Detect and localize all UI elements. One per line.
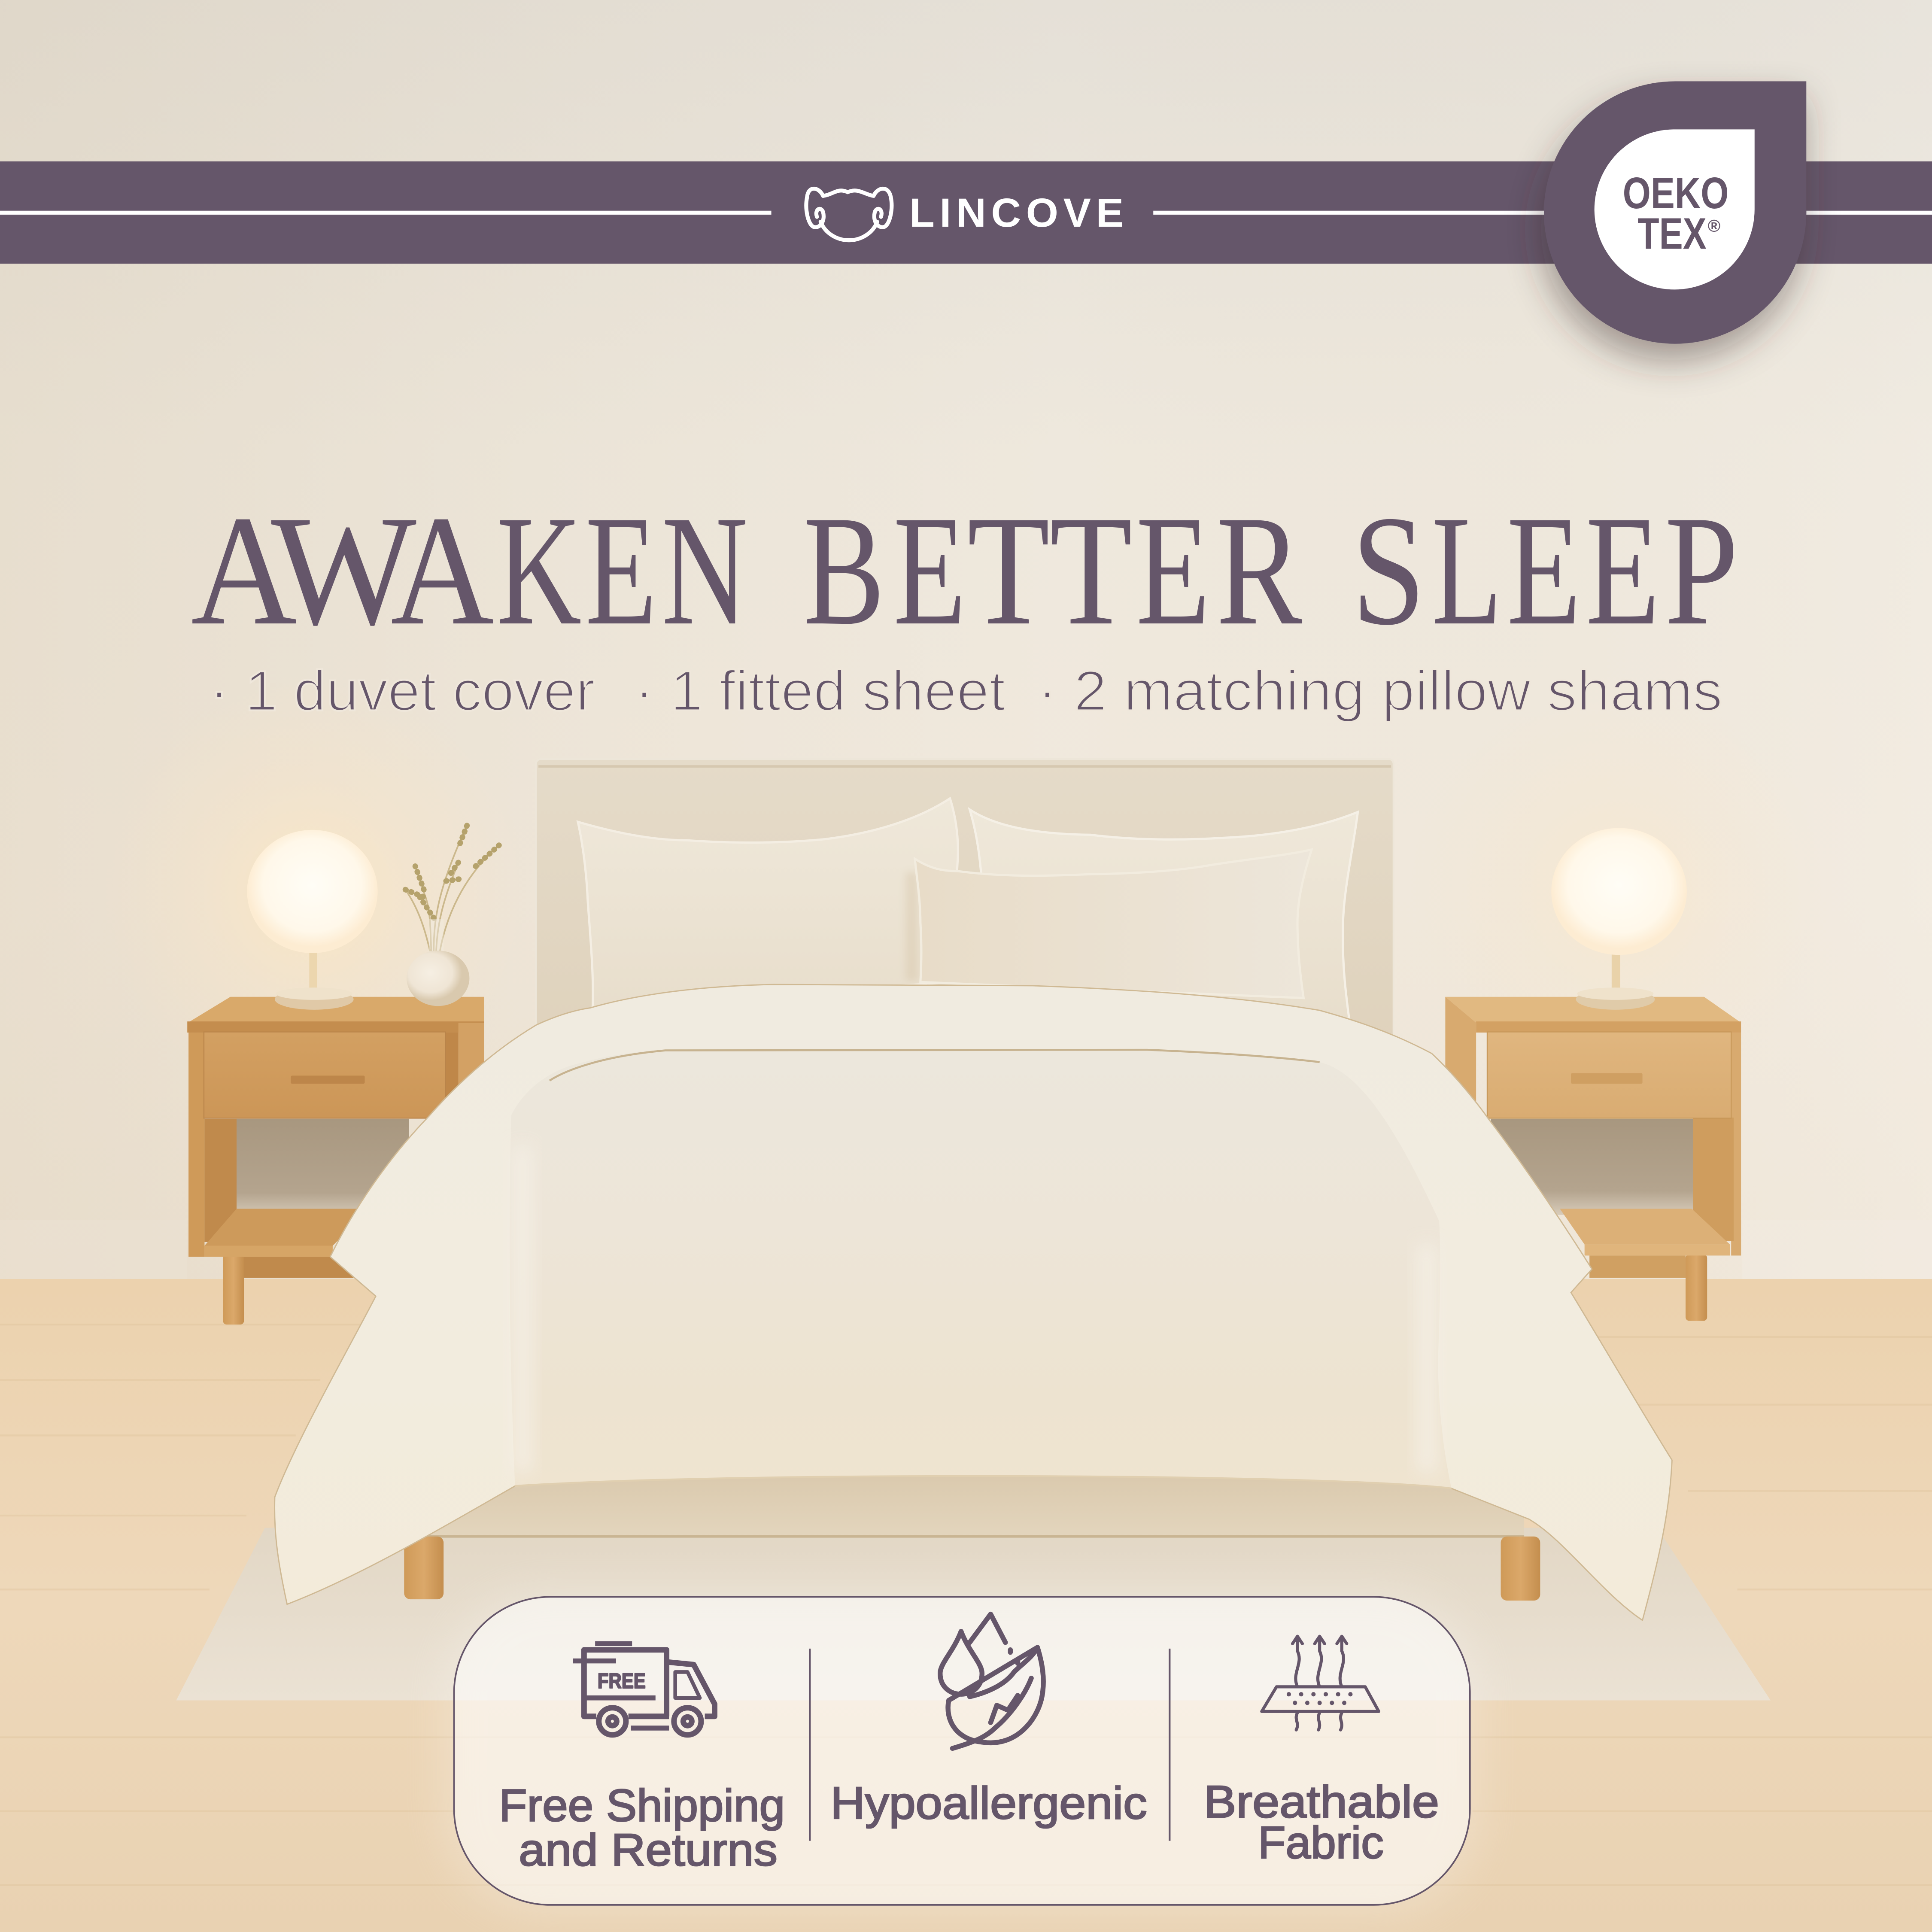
back right pillow: [970, 810, 1358, 1019]
left drawer handle: [291, 1075, 365, 1084]
back left pillow: [578, 799, 958, 1008]
logo: bear icon: [806, 188, 892, 240]
main title: E: [893, 483, 966, 658]
main title: A: [191, 483, 297, 658]
left lamp: [247, 830, 378, 1010]
feature labels: Hypoallergenic: [830, 1777, 1147, 1829]
divider two: [1169, 1649, 1170, 1841]
left bed leg: [404, 1537, 444, 1599]
left nightstand: [187, 997, 484, 1324]
main title: L: [1432, 483, 1502, 658]
subtitle list: · 2 matching pillow shams: [1037, 659, 1722, 722]
main title: T: [967, 483, 1050, 658]
lamp glow on wall: [96, 677, 1829, 1109]
main title: E: [585, 483, 657, 658]
duvet side highlight left: [513, 1146, 532, 1473]
subtitle list: · 1 duvet cover: [210, 659, 595, 722]
front pillow shadow: [905, 872, 918, 981]
feature labels: Breathable: [1204, 1776, 1439, 1827]
subtitle list: [210, 659, 1722, 722]
main title: R: [1216, 483, 1303, 658]
feature labels: [499, 1776, 1439, 1875]
vase with dried stems: [405, 826, 500, 1006]
OEKO-TEX badge: [1544, 81, 1806, 344]
right lamp: [1551, 828, 1687, 1010]
main title: T: [1050, 483, 1132, 658]
feature labels: Free Shipping: [499, 1780, 785, 1831]
panel glow: [441, 1587, 1482, 1917]
badge text: ®: [1708, 216, 1720, 236]
divider one: [809, 1649, 811, 1841]
icon: delivery truck: [573, 1643, 715, 1735]
bed base: [401, 1473, 1540, 1601]
left nightstand drawer: [204, 1032, 445, 1118]
wall background: [0, 0, 1932, 1282]
main title: N: [662, 483, 748, 658]
right bed leg: [1501, 1537, 1540, 1601]
icon: breathable fabric: [1262, 1636, 1379, 1730]
main title: E: [1507, 483, 1581, 658]
brand band: [0, 161, 1932, 264]
main title: E: [1136, 483, 1210, 658]
main title: W: [271, 483, 418, 658]
icon: water drop and feather: [940, 1614, 1043, 1748]
main title: P: [1665, 483, 1738, 658]
duvet fold crease: [550, 1050, 1320, 1081]
badge text: OEKO: [1623, 168, 1728, 218]
badge text: [1623, 168, 1728, 258]
area rug: [176, 1528, 1771, 1700]
main title: A: [391, 483, 494, 658]
pillows: [578, 799, 1358, 1019]
icon: delivery truck: FREE: [598, 1670, 646, 1693]
logo: wordmark: LINCOVE: [909, 190, 1129, 236]
feature labels: Fabric: [1258, 1817, 1384, 1868]
feature labels: and Returns: [519, 1824, 778, 1875]
headboard: [536, 759, 1394, 1050]
duvet: [275, 984, 1672, 1620]
wooden floor: [0, 1279, 1932, 1932]
main title: B: [803, 483, 885, 658]
duvet front panel: [510, 1050, 1452, 1488]
features panel: [454, 1597, 1470, 1905]
main title: [191, 483, 1738, 658]
duvet side highlight right: [1417, 1245, 1437, 1473]
right nightstand drawer: [1487, 1032, 1731, 1118]
badge text: TEX: [1637, 209, 1707, 258]
front pillow: [915, 850, 1312, 998]
right nightstand: [1445, 997, 1741, 1321]
main title: S: [1352, 483, 1425, 658]
right drawer handle: [1571, 1073, 1643, 1084]
subtitle list: · 1 fitted sheet: [635, 659, 1005, 722]
main title: K: [497, 483, 582, 658]
main title: E: [1586, 483, 1660, 658]
